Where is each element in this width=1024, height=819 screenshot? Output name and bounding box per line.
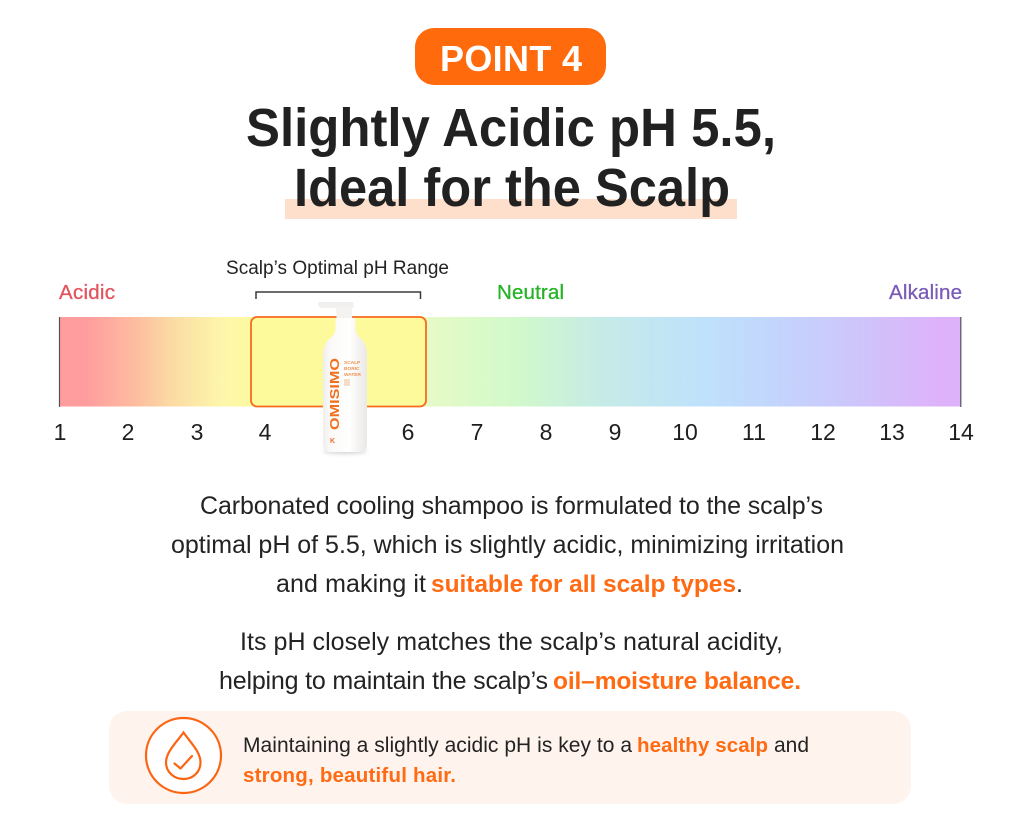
scale numbers: 11 xyxy=(742,419,766,445)
callout text: healthy scalp xyxy=(637,734,768,757)
title: Slightly Acidic pH 5.5, xyxy=(246,98,776,158)
scale numbers: 14 xyxy=(948,419,974,445)
badge: POINT 4: POINT 4 xyxy=(440,38,582,79)
icon: water drop with check xyxy=(146,718,221,793)
scale numbers: 3 xyxy=(191,419,203,445)
body paragraph 1: and making it xyxy=(276,570,426,598)
body paragraph 1: Carbonated cooling shampoo is formulated to the scalp’s xyxy=(200,492,823,520)
body paragraph 1: suitable for all scalp types xyxy=(431,571,736,598)
scale numbers: 9 xyxy=(609,419,621,445)
label: neutral: Neutral xyxy=(497,281,564,304)
body paragraph 1: . xyxy=(736,570,743,598)
label: acidic: Acidic xyxy=(59,281,115,304)
bottle product name: WATER xyxy=(344,372,362,378)
bottle product name xyxy=(344,360,362,378)
title xyxy=(246,98,776,219)
body paragraph 2 xyxy=(219,628,801,695)
body paragraph 2: Its pH closely matches the scalp’s natural acidity, xyxy=(240,628,783,656)
scale numbers: 8 xyxy=(540,419,552,445)
bottle small mark xyxy=(344,379,350,386)
scale numbers: 13 xyxy=(879,419,905,445)
scale numbers: 7 xyxy=(471,419,483,445)
scale numbers: 10 xyxy=(672,419,698,445)
callout text: and xyxy=(774,734,809,757)
scale numbers: 6 xyxy=(402,419,414,445)
optimal range highlight xyxy=(251,317,426,406)
scale numbers xyxy=(54,419,974,445)
callout xyxy=(109,711,911,804)
body paragraph 2: oil–moisture balance. xyxy=(553,668,801,695)
body paragraph 1: optimal pH of 5.5, which is slightly acidic, minimizing irritation xyxy=(171,531,844,559)
callout text: strong, beautiful hair. xyxy=(243,764,456,787)
body paragraph 2: helping to maintain the scalp’s xyxy=(219,667,548,695)
badge: POINT 4 xyxy=(415,28,606,85)
scale numbers: 4 xyxy=(259,419,272,445)
bottle product name: BORIC xyxy=(344,366,360,372)
range bracket xyxy=(256,292,420,299)
label: alkaline: Alkaline xyxy=(889,281,962,304)
scale numbers: 12 xyxy=(810,419,836,445)
range label: Scalp’s Optimal pH Range xyxy=(226,258,449,279)
callout text: Maintaining a slightly acidic pH is key to a xyxy=(243,734,632,757)
body paragraph 1 xyxy=(171,492,844,598)
bottle brand: OMISIMO xyxy=(328,358,342,430)
title: Ideal for the Scalp xyxy=(294,158,730,218)
scale numbers: 1 xyxy=(54,419,66,445)
pH scale chart xyxy=(54,258,974,454)
callout text xyxy=(243,734,809,787)
product bottle xyxy=(318,302,367,454)
bottle product name: SCALP xyxy=(344,360,361,366)
scale numbers: 2 xyxy=(122,419,134,445)
gradient bar xyxy=(59,317,961,406)
bottle logo: K xyxy=(330,438,335,445)
